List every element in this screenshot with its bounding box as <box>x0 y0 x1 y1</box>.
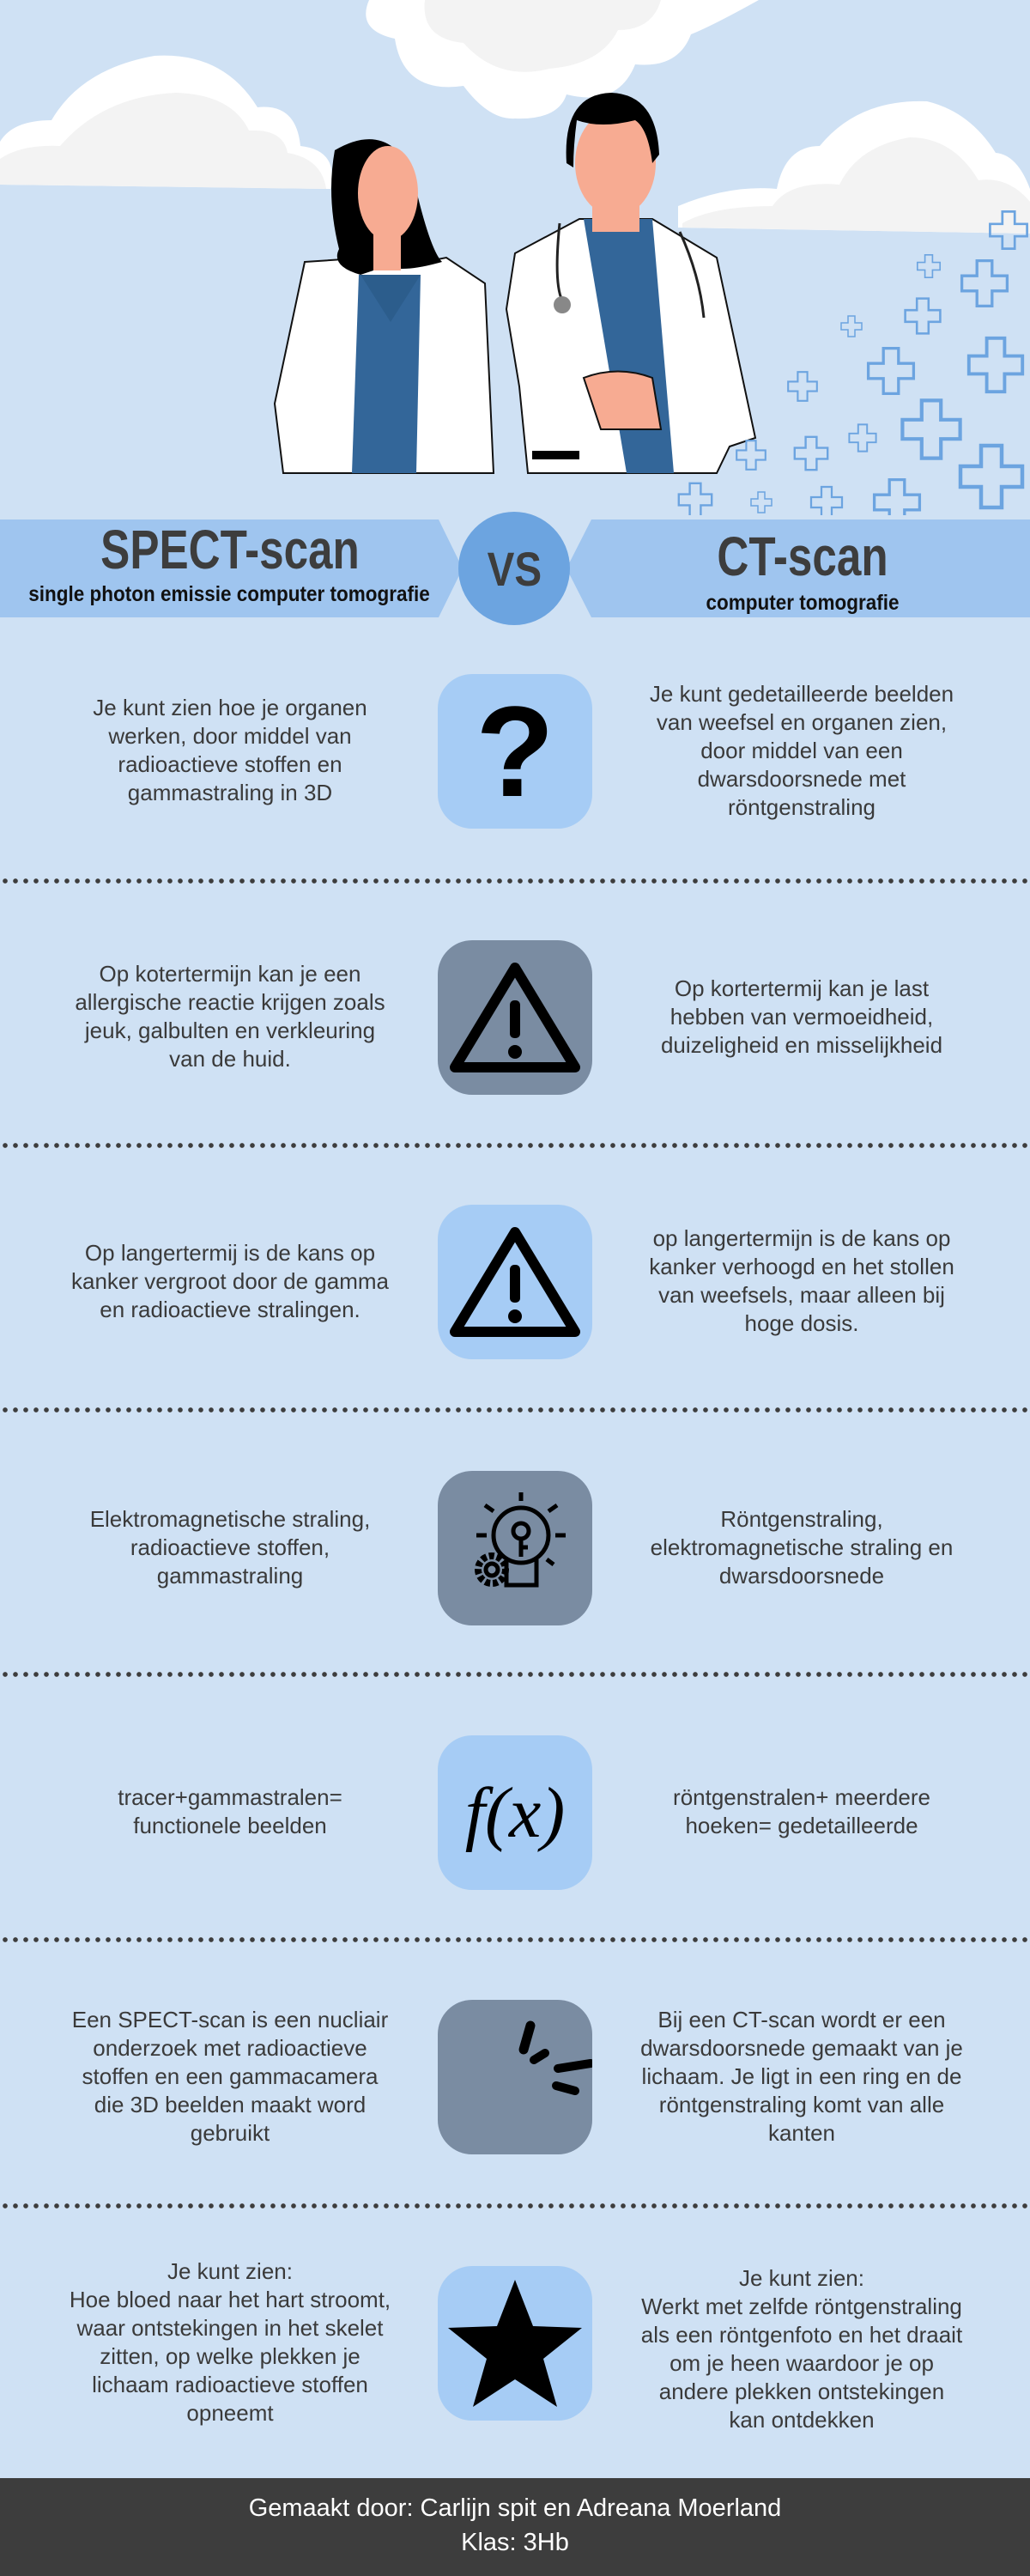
icon: warning <box>438 1205 592 1359</box>
doctor: man <box>506 93 755 473</box>
decorative crosses <box>679 211 1027 525</box>
row 4: radiation: Röntgenstraling, elektromagnetische straling en dwarsdoorsnede <box>651 1506 953 1589</box>
VS circle: VS <box>487 541 542 596</box>
row 6: description: Een SPECT-scan is een nucliair onderzoek met radioactieve stoffen en een gammacamera die 3D beelden maakt word gebruikt <box>72 2006 388 2145</box>
icon: question mark <box>438 674 592 829</box>
row 7: what you see: Je kunt zien: <box>739 2265 864 2291</box>
icon: question mark: ? <box>476 678 554 823</box>
row 2: short term: Op kortertermij kan je last hebben van vermoeidheid, duizeligheid en misselijkheid <box>661 975 942 1058</box>
footer <box>0 2478 1030 2576</box>
row 3: long term: Op langertermij is de kans op kanker vergroot door de gamma en radioactieve stralingen. <box>71 1240 389 1322</box>
row 6: description <box>72 2000 963 2154</box>
VS circle <box>458 512 570 625</box>
cloud: center <box>366 0 759 118</box>
row 2: short term: Op kotertermijn kan je een allergische reactie krijgen zoals jeuk, galbulten en verkleuring van de huid. <box>75 961 385 1072</box>
row 7: what you see: Werkt met zelfde röntgenstraling als een röntgenfoto en het draait om je heen waardoor je op andere plekken ontstekingen kan ontdekken <box>641 2293 962 2433</box>
footer: Gemaakt door: Carlijn spit en Adreana Moerland <box>249 2494 781 2522</box>
row 7: what you see: Je kunt zien: <box>167 2258 293 2284</box>
icon: f(x): f(x) <box>465 1772 565 1853</box>
row 4: radiation: Elektromagnetische straling, radioactieve stoffen, gammastraling <box>90 1506 370 1589</box>
row 1: what: Je kunt zien hoe je organen werken, door middel van radioactieve stoffen en gammastraling in 3D <box>93 695 367 805</box>
doctor: woman <box>275 139 494 473</box>
icon: lightbulb <box>438 1471 592 1625</box>
row 2: short term <box>75 940 942 1095</box>
row 6: description: Bij een CT-scan wordt er een dwarsdoorsnede gemaakt van je lichaam. Je ligt in een ring en de röntgenstraling komt van alle kanten <box>640 2006 963 2145</box>
cloud: right <box>678 101 1030 234</box>
title: SPECT-scan: SPECT-scan <box>100 519 360 580</box>
icon: f(x) <box>438 1735 592 1890</box>
row 1: what <box>93 674 954 829</box>
header band <box>0 512 1030 625</box>
title: CT-scan: CT-scan <box>717 526 888 587</box>
row 5: formula <box>118 1735 930 1890</box>
row 4: radiation <box>90 1471 953 1625</box>
subtitle: SPECT: single photon emissie computer tomografie <box>28 582 430 606</box>
row 5: formula: tracer+gammastralen= functionele beelden <box>118 1784 342 1838</box>
row 3: long term: op langertermijn is de kans op kanker verhoogd en het stollen van weefsels, maar alleen bij hoge dosis. <box>649 1225 954 1336</box>
header illustration <box>0 0 1030 515</box>
row 3: long term <box>71 1205 954 1359</box>
cloud: left <box>0 56 332 189</box>
footer: Klas: 3Hb <box>461 2529 569 2556</box>
row 5: formula: röntgenstralen+ meerdere hoeken= gedetailleerde <box>673 1784 930 1838</box>
row 7: what you see <box>70 2258 963 2433</box>
icon: exclamation lines <box>438 2000 592 2154</box>
subtitle: CT: computer tomografie <box>706 591 900 615</box>
row 1: what: Je kunt gedetailleerde beelden van weefsel en organen zien, door middel van een dwarsdoorsnede met röntgenstraling <box>650 680 954 819</box>
row 7: what you see: Hoe bloed naar het hart stroomt, waar ontstekingen in het skelet zitten, op welke plekken je lichaam radioactieve stoffen opneemt <box>70 2287 391 2426</box>
icon: star <box>438 2266 592 2421</box>
icon: warning <box>438 940 592 1095</box>
